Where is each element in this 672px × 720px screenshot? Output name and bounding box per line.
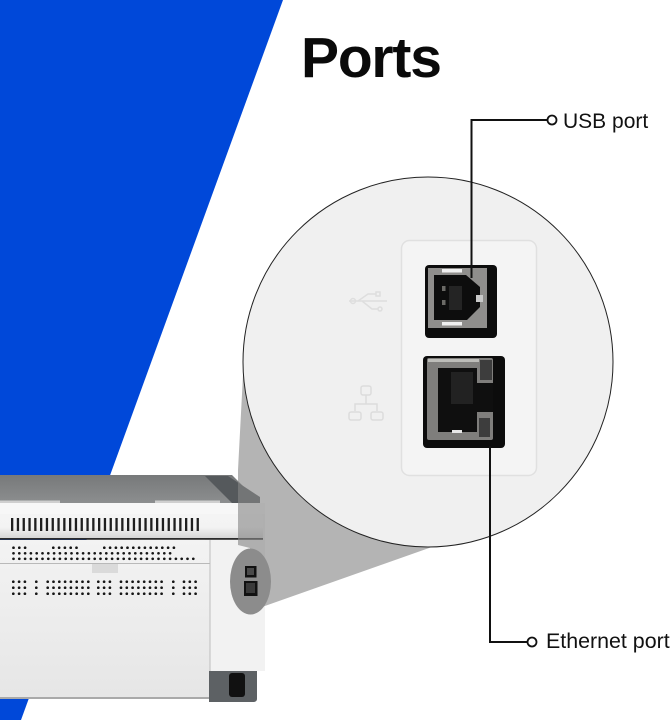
- Ethernet leader line: [490, 446, 528, 642]
- printer rear panel: [0, 540, 210, 697]
- printer side body: [205, 503, 265, 671]
- USB port callout: [472, 110, 648, 278]
- dot grid lower: [13, 582, 197, 594]
- printer top cover: [0, 475, 260, 503]
- power socket block: [209, 671, 257, 702]
- Ethernet port detail: [423, 356, 505, 448]
- icon: USB symbol: [349, 292, 387, 311]
- printer upper white band: [0, 503, 265, 514]
- small Ethernet port: [244, 581, 258, 596]
- magnifier cone: [238, 250, 480, 607]
- small USB port: [245, 566, 256, 578]
- blue diagonal background: [0, 0, 283, 720]
- Ethernet port callout: [490, 446, 670, 653]
- icon: network symbol: [349, 386, 383, 420]
- port plate: [402, 240, 536, 476]
- USB leader line: [472, 120, 548, 278]
- title: Ports: [301, 26, 441, 90]
- panel latch: [92, 564, 118, 573]
- Ethernet port label: Ethernet port: [546, 629, 670, 653]
- Ethernet leader end marker: [528, 638, 536, 646]
- printer control corner: [205, 476, 260, 503]
- power inlet: [229, 673, 245, 697]
- USB leader end marker: [548, 116, 556, 124]
- dot grid upper: [14, 548, 198, 559]
- small port oval: [230, 548, 271, 614]
- printer rear view: [0, 475, 265, 702]
- zoomed port circle: [243, 177, 613, 547]
- printer base edge: [0, 697, 209, 699]
- USB port label: USB port: [563, 110, 648, 133]
- USB port detail: [425, 265, 497, 338]
- vent slits: [11, 518, 199, 531]
